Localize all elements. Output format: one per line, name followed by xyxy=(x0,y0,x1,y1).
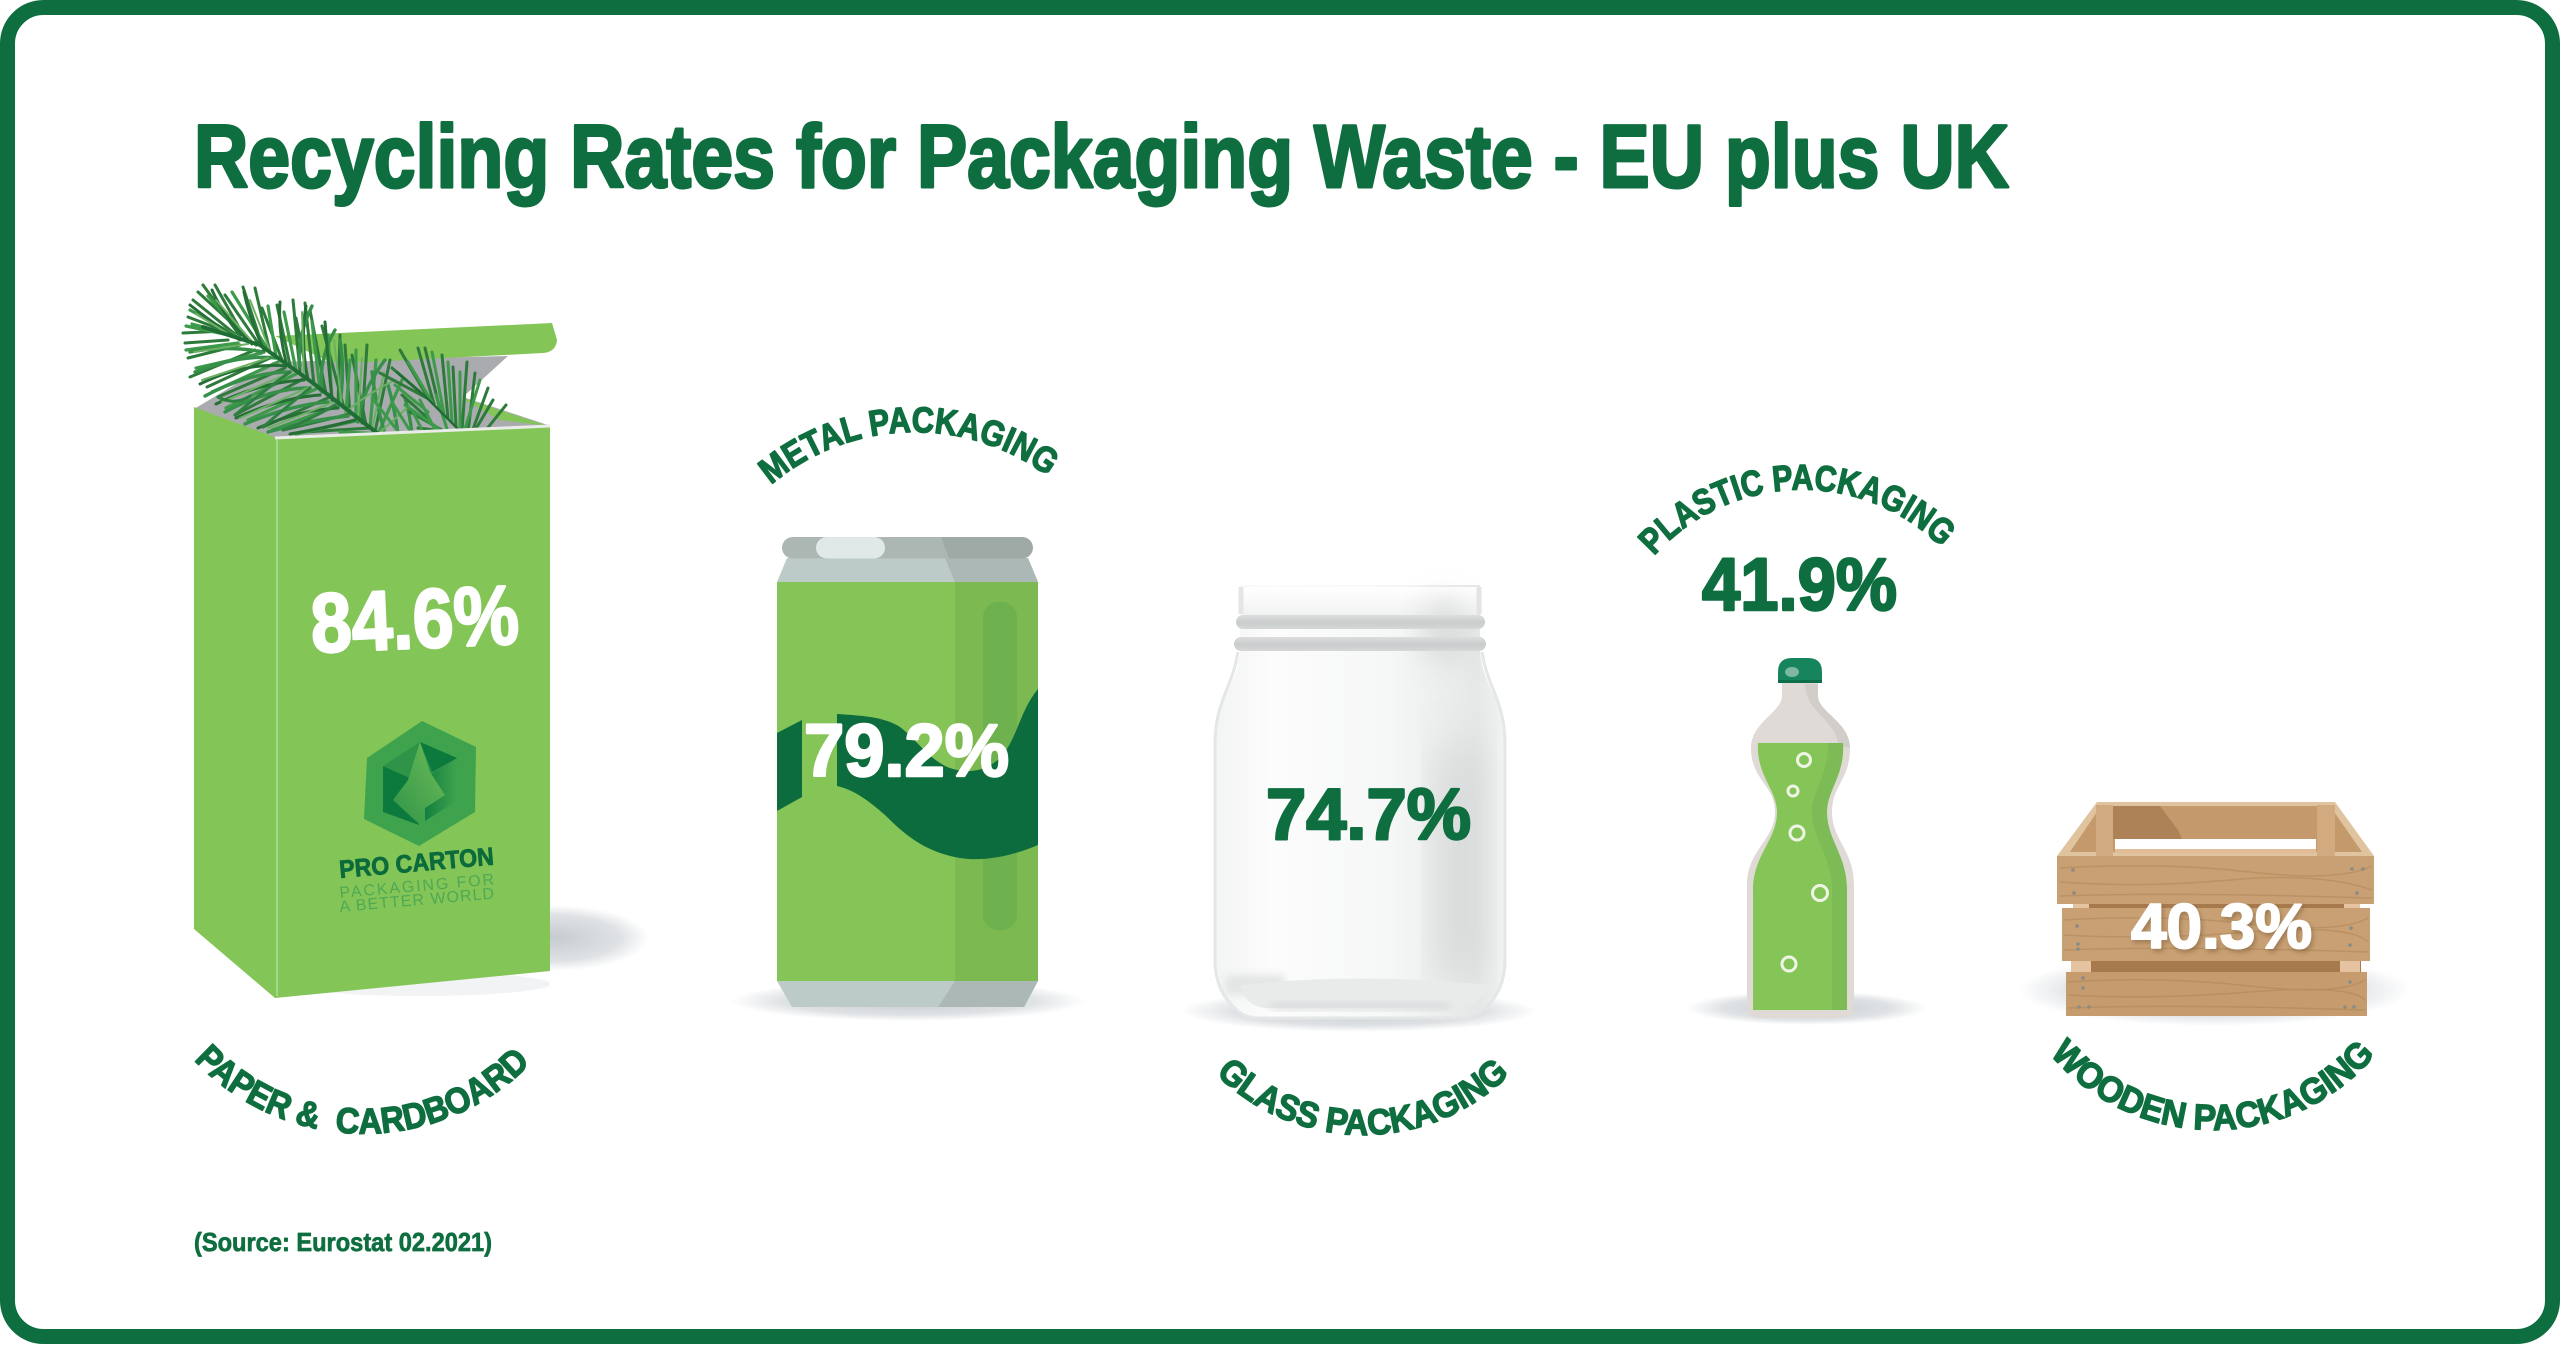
title: Recycling Rates for Packaging Waste - EU plus UK xyxy=(194,106,2009,206)
icon: glass jar xyxy=(1181,585,1537,1032)
percentage: plastic: 41.9% xyxy=(1702,543,1897,626)
icon: drink can xyxy=(730,537,1086,1021)
panel: wooden packaging xyxy=(2033,802,2395,1131)
panel: paper and cardboard xyxy=(182,283,642,1134)
icon: carton box with pine branch xyxy=(183,285,649,998)
logo: Pro Carton xyxy=(338,721,495,916)
percentage: wood: 40.3% xyxy=(2131,892,2312,962)
percentage: metal: 79.2% xyxy=(804,709,1009,792)
label: plastic packaging: PLASTIC PACKAGING xyxy=(1636,464,1954,556)
logo: Pro Carton: A BETTER WORLD xyxy=(339,886,495,916)
logo: Pro Carton: PACKAGING FOR xyxy=(339,872,495,902)
percentage: paper: 84.6% xyxy=(309,568,521,670)
source note: (Source: Eurostat 02.2021) xyxy=(194,1227,492,1257)
panel: metal packaging xyxy=(744,406,1072,1020)
label: wooden packaging: WOODEN PACKAGING xyxy=(2053,1036,2372,1131)
icon: wooden crate xyxy=(2018,802,2410,1026)
panel: glass packaging xyxy=(1195,585,1524,1136)
percentage: glass: 74.7% xyxy=(1266,775,1471,855)
label: paper and cardboard: PAPER & CARDBOARD xyxy=(194,1043,526,1134)
label: metal packaging: METAL PACKAGING xyxy=(756,406,1058,484)
panel: plastic packaging xyxy=(1636,464,1954,1024)
icon: plastic bottle xyxy=(1687,658,1927,1025)
label: glass packaging: GLASS PACKAGING xyxy=(1220,1060,1506,1136)
logo: Pro Carton: PRO CARTON xyxy=(338,843,495,884)
